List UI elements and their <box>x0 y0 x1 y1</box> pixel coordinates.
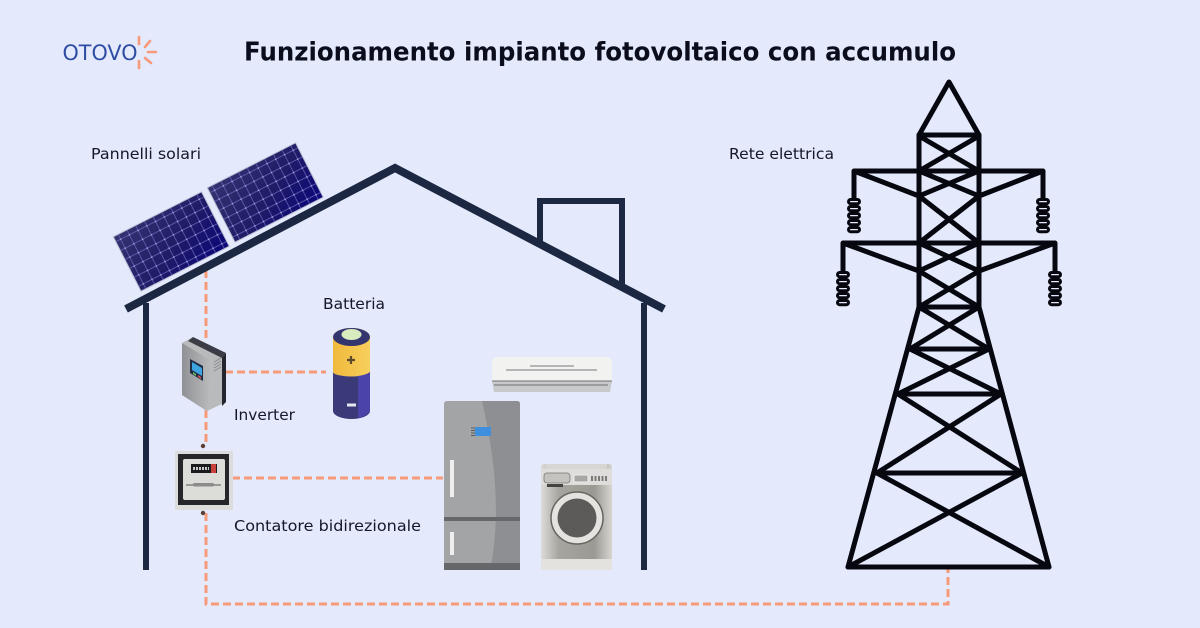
inverter <box>182 337 226 411</box>
tower mast <box>919 135 979 307</box>
title: Funzionamento impianto fotovoltaico con accumulo <box>244 38 956 68</box>
tower legs <box>848 307 1049 567</box>
logo: OTOVO <box>62 37 156 68</box>
fridge display <box>475 427 491 436</box>
transmission tower <box>838 82 1060 567</box>
label: contatore bidirezionale: Contatore bidirezionale <box>234 517 421 535</box>
walls <box>146 303 644 570</box>
connection lines: orange dashed cables <box>206 270 948 604</box>
label: inverter: Inverter <box>234 406 296 424</box>
battery plus <box>347 356 355 364</box>
inverter screen <box>190 359 203 381</box>
washer drum door <box>551 492 603 544</box>
battery <box>333 328 370 419</box>
logo sun rays <box>139 37 156 68</box>
lower cross arms <box>843 243 1055 271</box>
panel left <box>113 191 230 292</box>
meter display <box>191 464 217 473</box>
washing machine <box>541 464 612 570</box>
upper cross arms <box>854 171 1043 198</box>
label: rete elettrica: Rete elettrica <box>729 145 834 163</box>
air conditioner <box>492 357 612 392</box>
meter gauge bar <box>186 484 221 486</box>
tower top <box>919 82 979 135</box>
fridge <box>444 401 520 570</box>
insulators <box>838 200 1060 305</box>
battery minus <box>347 404 356 406</box>
logo wordmark: OTOVO <box>62 41 138 66</box>
chimney <box>540 201 622 285</box>
solar panels <box>113 142 324 292</box>
roof <box>126 168 664 309</box>
fridge handles <box>450 460 454 497</box>
label: pannelli solari: Pannelli solari <box>91 145 201 163</box>
panel right <box>207 142 324 243</box>
meter terminals <box>201 444 205 448</box>
bidirectional meter <box>175 444 233 515</box>
label: batteria: Batteria <box>323 295 385 313</box>
washer control panel <box>544 473 570 483</box>
house outline <box>126 168 664 570</box>
